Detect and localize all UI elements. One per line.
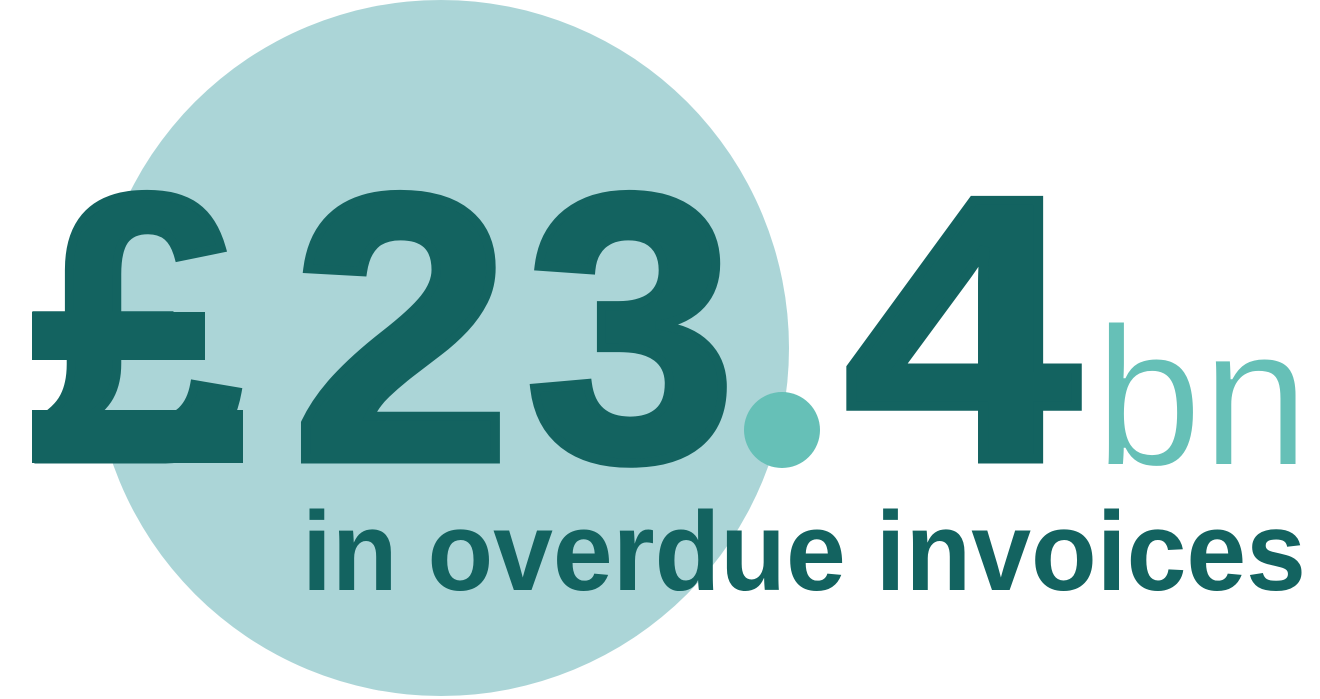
caption: in overdue invoices — [302, 489, 1306, 614]
headline figure: £23: 3 — [526, 117, 736, 540]
background circle — [93, 0, 789, 696]
unit: bn: bn — [1095, 286, 1309, 507]
headline figure: £23 — [32, 117, 736, 540]
decimal point — [744, 392, 820, 468]
headline figure: £23: £ — [33, 117, 241, 540]
headline figure: 4: 4 — [845, 119, 1082, 539]
headline figure: £23: 2 — [292, 117, 511, 540]
